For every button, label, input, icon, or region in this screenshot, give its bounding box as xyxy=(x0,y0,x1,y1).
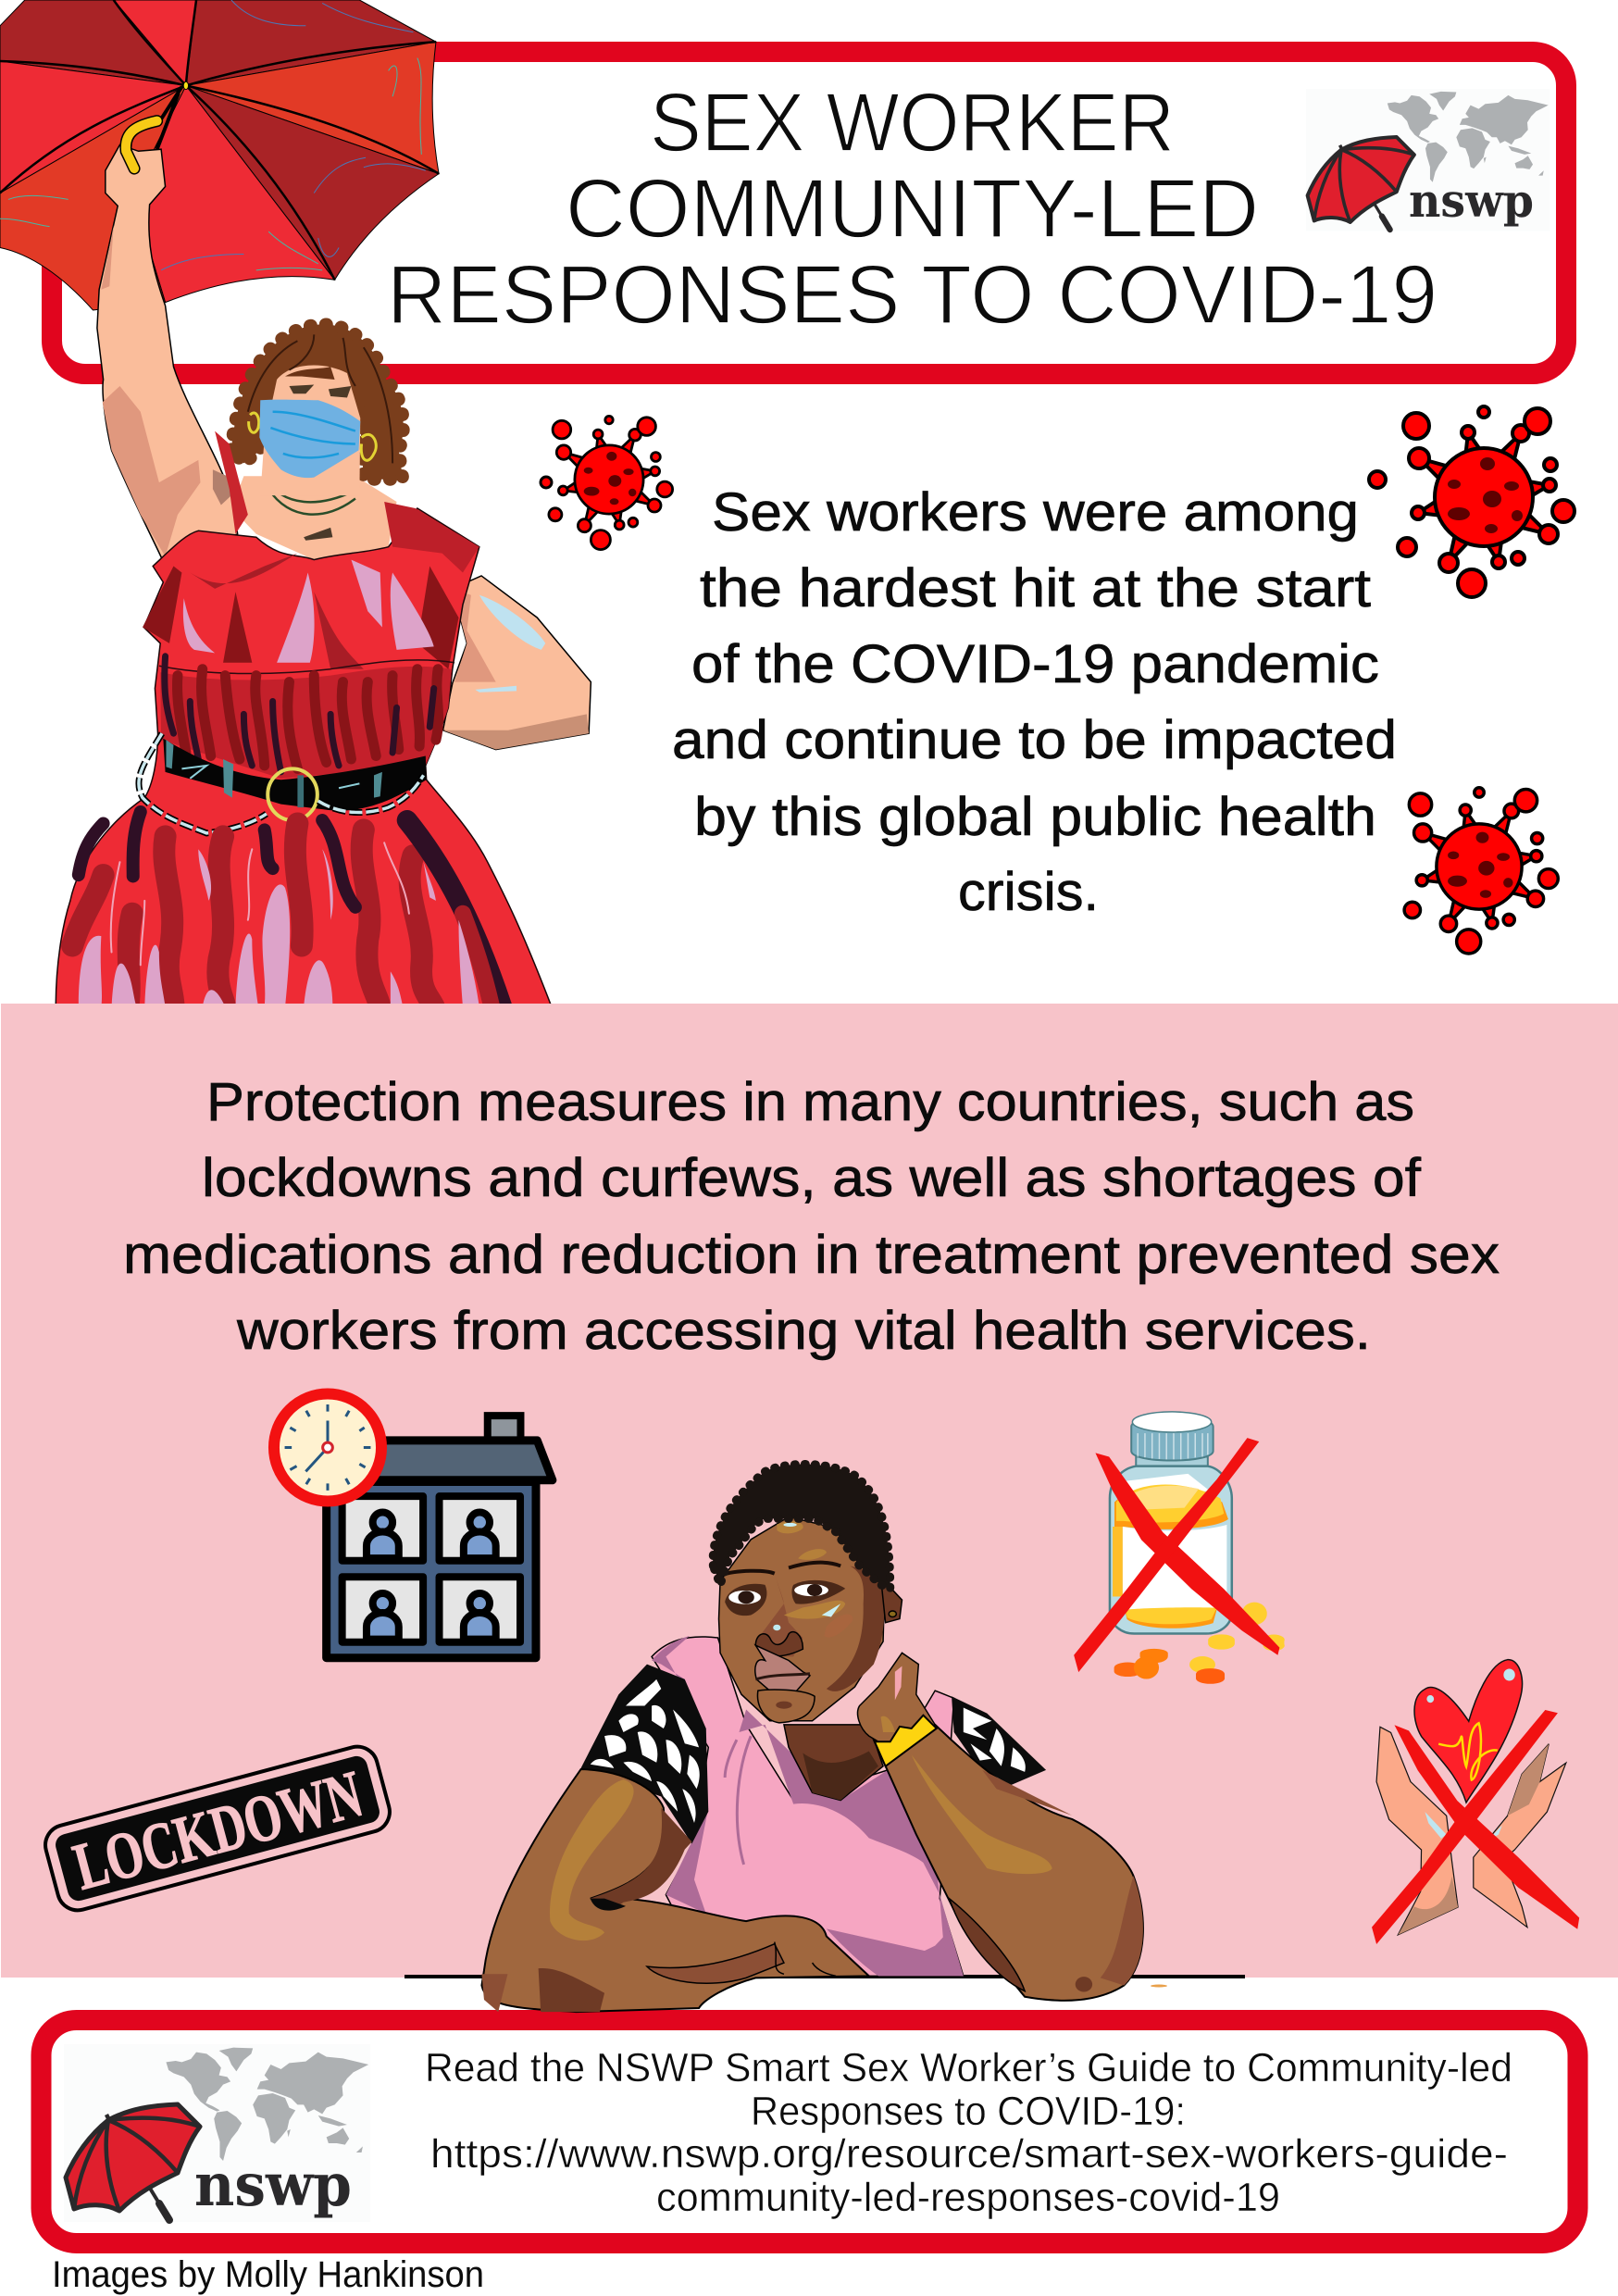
text: intro: by this global public health xyxy=(694,787,1376,847)
icon: virus lower right xyxy=(1404,788,1558,954)
earrings xyxy=(249,413,376,460)
table line xyxy=(404,1975,1245,1978)
hand and right arm xyxy=(874,1725,1143,2001)
text: footer link: https://www.nswp.org/resource/smart-sex-workers-guide- xyxy=(430,2131,1508,2177)
title xyxy=(387,77,1438,342)
hair xyxy=(713,1464,890,1589)
logo: nswp header: nswp xyxy=(1409,173,1534,228)
orange spot xyxy=(1151,1985,1167,1987)
text: protection measures: lockdowns and curfews, as well as shortages of xyxy=(202,1148,1422,1208)
sleeves xyxy=(581,1665,708,1843)
logo: nswp footer xyxy=(64,2044,370,2222)
illustration: woman resting head on hand xyxy=(481,1464,1143,2012)
skirt shading xyxy=(72,812,502,1007)
text: footer link xyxy=(425,2045,1512,2220)
text: intro: of the COVID-19 pandemic xyxy=(691,634,1379,694)
footer frame xyxy=(41,2020,1577,2243)
icon: house with clock xyxy=(274,1393,553,1658)
text: footer link: community-led-responses-covid-19 xyxy=(656,2175,1280,2220)
illustration: woman with red umbrella xyxy=(0,0,591,1007)
title: RESPONSES TO COVID-19 xyxy=(387,249,1438,342)
ruffle details xyxy=(143,567,181,643)
gathered waist xyxy=(165,656,439,772)
chain xyxy=(139,733,424,833)
logo: nswp footer: nswp xyxy=(194,2151,352,2220)
text: footer link: Responses to COVID-19: xyxy=(751,2089,1186,2134)
title: SEX WORKER xyxy=(650,77,1175,169)
logo: nswp header xyxy=(1306,89,1550,231)
panel: pink background xyxy=(1,1004,1618,1978)
icon: heart and hands crossed out xyxy=(1372,1660,1579,1944)
right arm xyxy=(443,576,591,750)
text: protection measures: workers from accessing vital health services. xyxy=(236,1301,1371,1361)
text: intro xyxy=(672,482,1397,922)
text: protection measures xyxy=(123,1072,1500,1361)
icon: virus top right xyxy=(1369,406,1574,597)
text: intro: and continue to be impacted xyxy=(672,710,1397,770)
text: intro: crisis. xyxy=(958,862,1099,922)
umbrella canopy xyxy=(0,0,439,310)
arm and hand xyxy=(97,144,238,567)
dress xyxy=(56,508,552,1007)
text: image credit: Images by Molly Hankinson xyxy=(52,2254,484,2295)
belt xyxy=(163,739,427,811)
neck and chest xyxy=(231,476,397,560)
icon: virus top left xyxy=(541,416,673,550)
stamp: lockdown: LOCKDOWN xyxy=(67,1756,369,1904)
title: COMMUNITY-LED xyxy=(566,163,1259,256)
text: protection measures: medications and reduction in treatment prevented sex xyxy=(123,1225,1500,1285)
header frame xyxy=(52,52,1566,374)
head xyxy=(719,1516,885,1721)
text: protection measures: Protection measures in many countries, such as xyxy=(206,1072,1414,1132)
text: intro: the hardest hit at the start xyxy=(700,558,1371,618)
left arm xyxy=(481,1769,869,2012)
icon: pill bottle crossed out xyxy=(1074,1412,1285,1684)
stamp: lockdown xyxy=(41,1742,394,1915)
text: footer link: Read the NSWP Smart Sex Worker’s Guide to Community-led xyxy=(425,2045,1512,2090)
text: intro: Sex workers were among xyxy=(712,482,1359,543)
neck xyxy=(784,1725,883,1801)
hair xyxy=(231,324,404,480)
mask xyxy=(259,400,360,478)
